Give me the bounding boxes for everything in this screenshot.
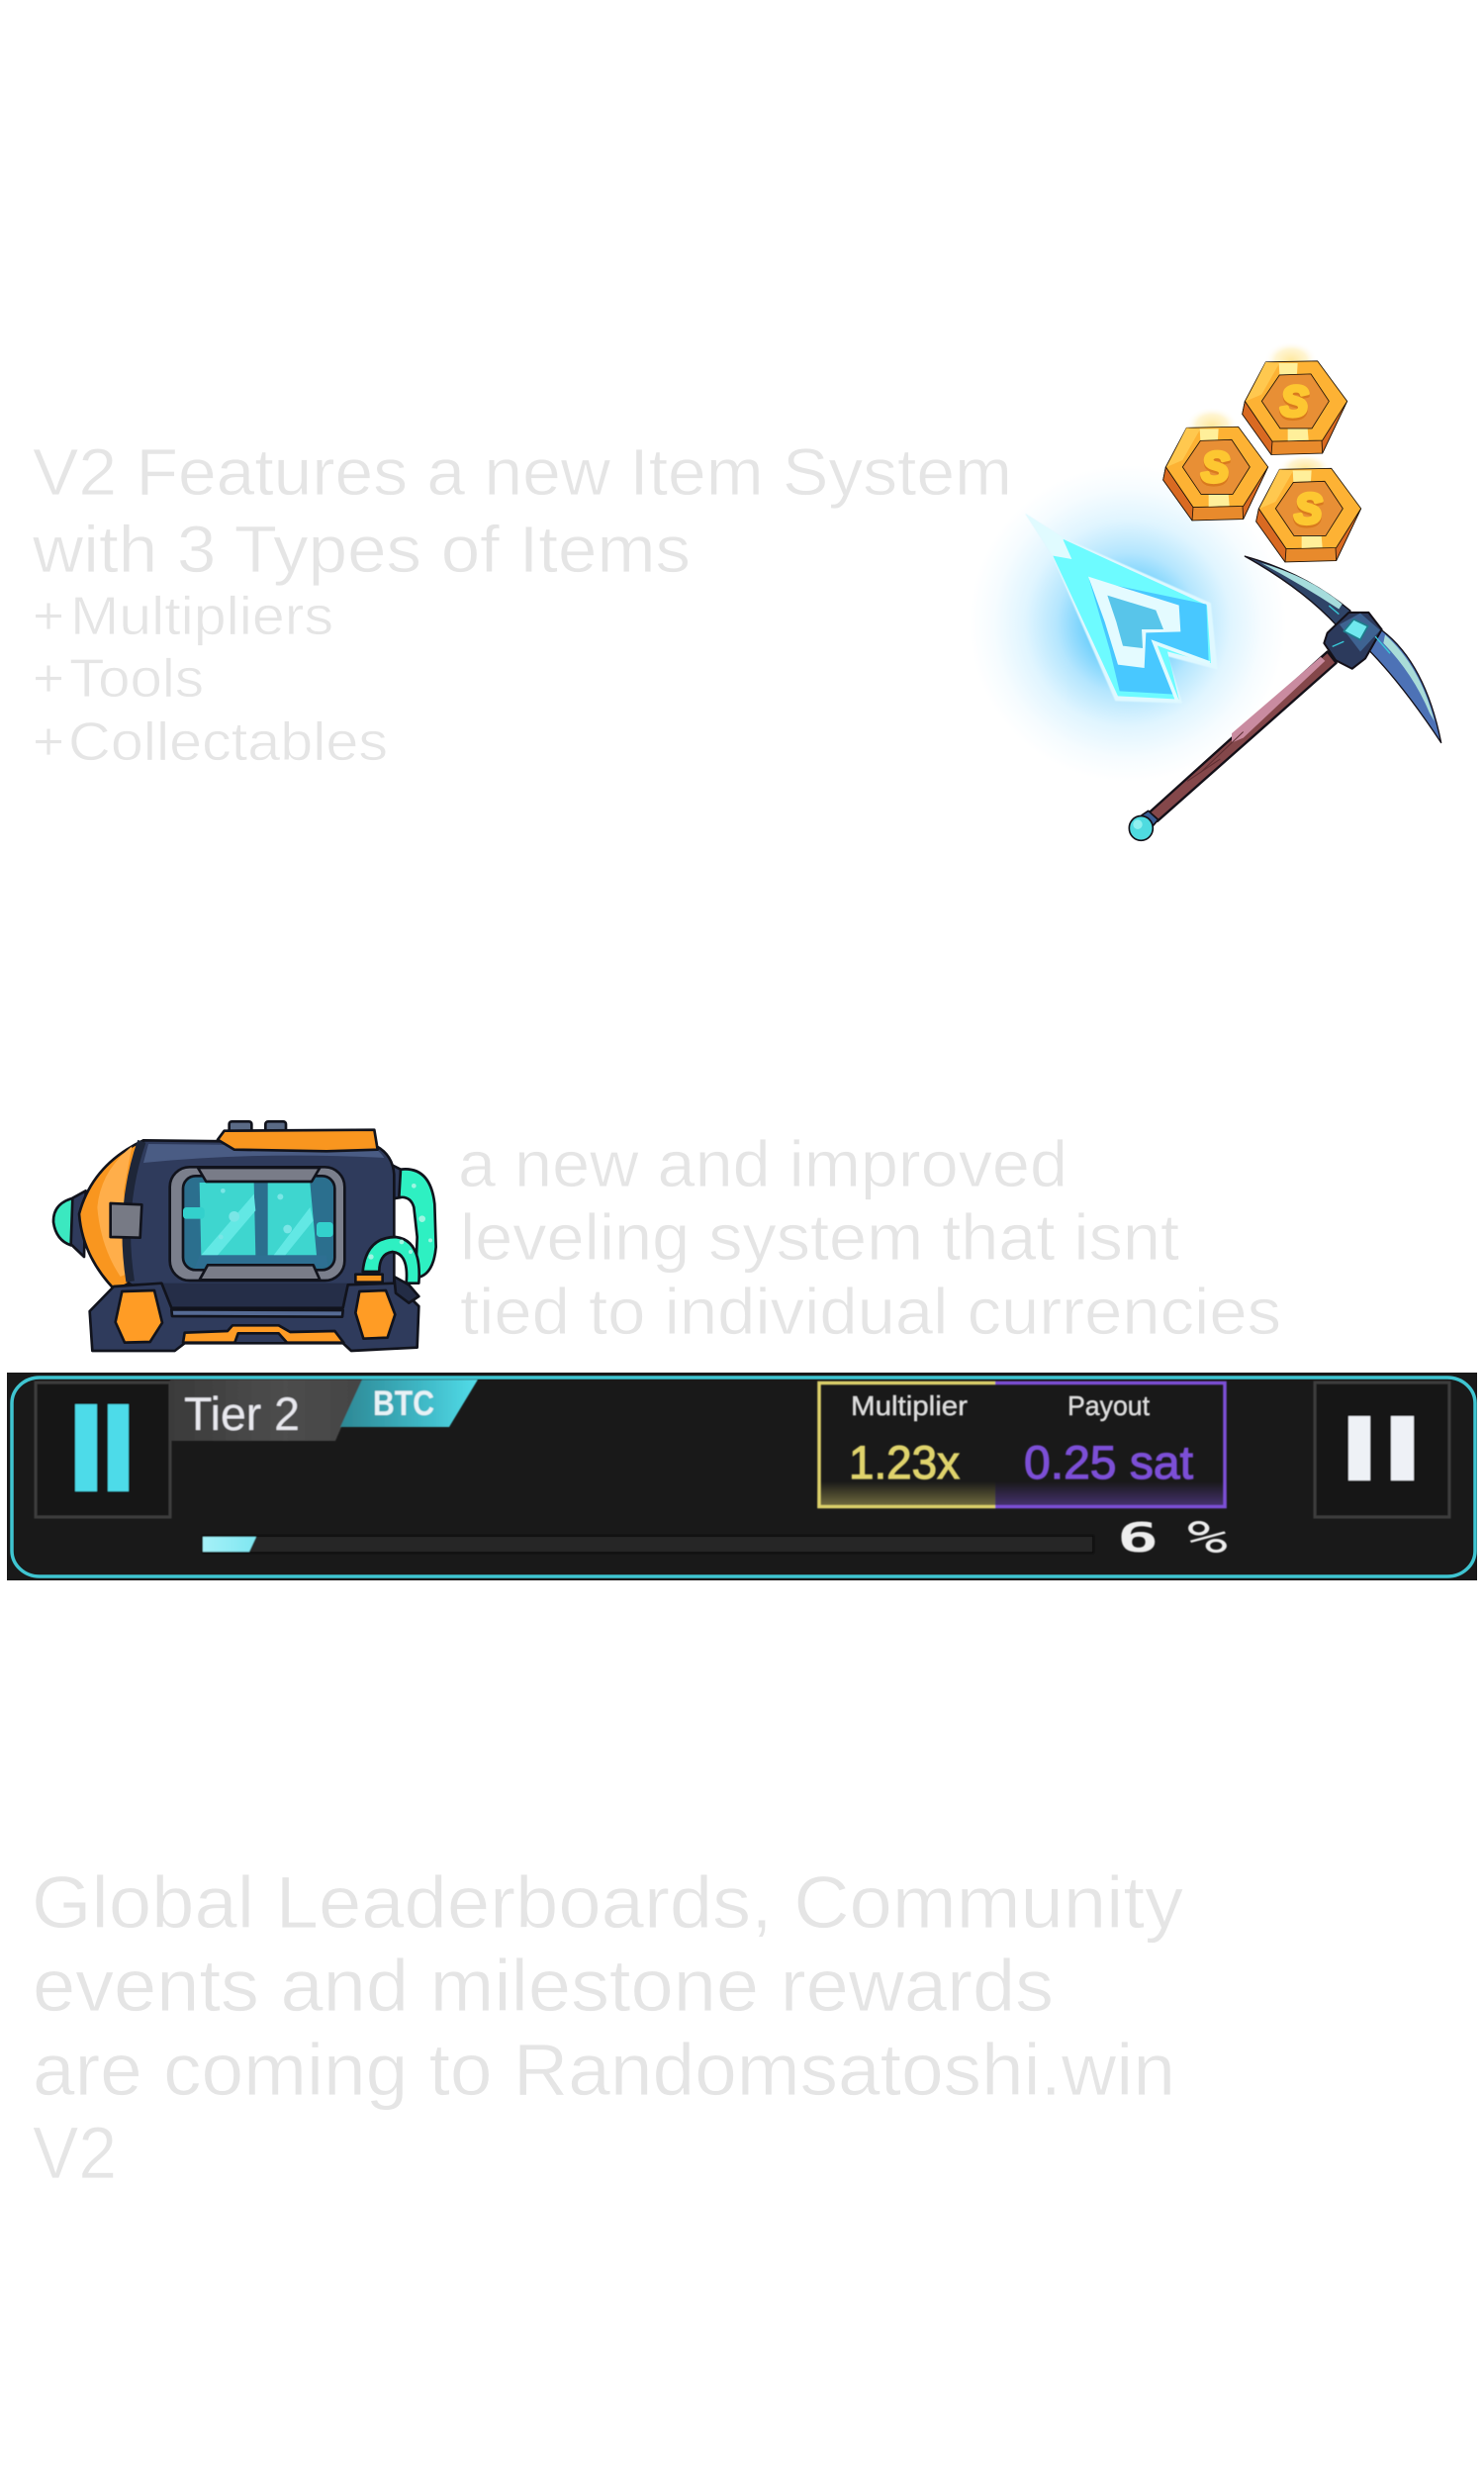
icon: cursor multiplier item bbox=[1025, 514, 1218, 704]
payout box: Payout bbox=[1067, 1390, 1150, 1421]
list: item types: Tools bbox=[69, 647, 204, 709]
text: leaderboards bbox=[32, 1861, 1183, 2194]
text: leveling system bbox=[458, 1127, 1281, 1348]
list: item types: Multipliers bbox=[70, 585, 333, 646]
currency tag: BTC bbox=[373, 1384, 434, 1423]
text: leaderboards: are coming to Randomsatoshi.win bbox=[33, 2029, 1175, 2111]
icon: miner pod bbox=[53, 1121, 436, 1351]
progress value: 6 bbox=[1117, 1514, 1159, 1562]
multiplier box: 1.23x bbox=[849, 1436, 960, 1488]
progress value bbox=[1117, 1511, 1228, 1564]
list: item types: + bbox=[33, 711, 64, 772]
text: leveling system: leveling system that isnt bbox=[460, 1200, 1179, 1274]
text: leaderboards: V2 bbox=[33, 2112, 117, 2194]
list: item types bbox=[33, 585, 388, 772]
multiplier box: Multiplier bbox=[851, 1390, 968, 1421]
multiplier box bbox=[817, 1383, 995, 1508]
text: leveling system: a new and improved bbox=[458, 1127, 1067, 1200]
left pause button bbox=[36, 1382, 170, 1517]
payout box: 0.25 sat bbox=[1024, 1436, 1193, 1488]
progress value: % bbox=[1187, 1511, 1228, 1564]
heading: item system: V2 Features a new Item System bbox=[33, 435, 1012, 510]
text: leaderboards: Global Leaderboards, Community bbox=[32, 1861, 1183, 1944]
tier tag: Tier 2 bbox=[184, 1387, 300, 1440]
text: leveling system: tied to individual currencies bbox=[460, 1275, 1281, 1348]
currency tag bbox=[340, 1380, 478, 1427]
icon: blue glow behind cursor bbox=[970, 465, 1286, 782]
list: item types: Collectables bbox=[68, 711, 388, 772]
list: item types: + bbox=[33, 585, 64, 646]
right pause button bbox=[1315, 1382, 1449, 1517]
panel: miner status bar bbox=[7, 1373, 1477, 1580]
progress bar bbox=[203, 1536, 1093, 1553]
icon: pickaxe bbox=[1129, 556, 1441, 840]
payout box bbox=[995, 1383, 1227, 1508]
heading: item system bbox=[32, 435, 1012, 587]
tier tag bbox=[170, 1380, 362, 1441]
text: leaderboards: events and milestone rewards bbox=[33, 1945, 1054, 2027]
list: item types: + bbox=[33, 647, 64, 709]
icon: gold coins bbox=[1163, 341, 1361, 562]
heading: item system: with 3 Types of Items bbox=[32, 513, 691, 587]
